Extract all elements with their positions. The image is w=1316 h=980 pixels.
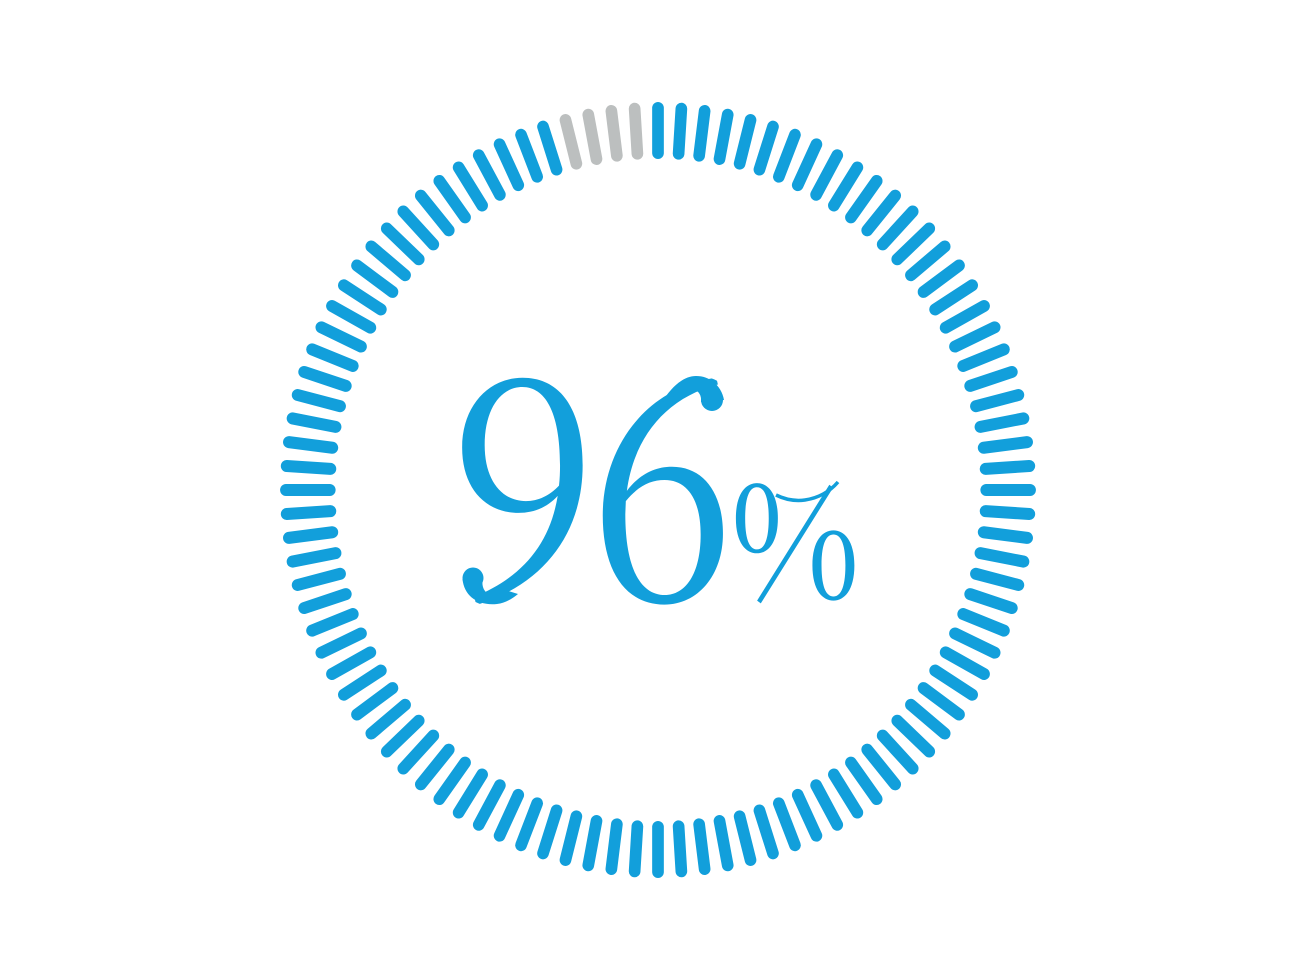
progress ring: gray remaining ticks (4 of 100) [558,102,644,171]
progress ring: blue filled ticks (96 of 100) [268,102,1048,891]
percentage value: 96%: % [730,419,861,644]
percentage value: 96%: 9 [451,243,597,689]
percentage value: 96%: 6 [590,243,736,689]
percentage value: 96% [451,243,861,689]
